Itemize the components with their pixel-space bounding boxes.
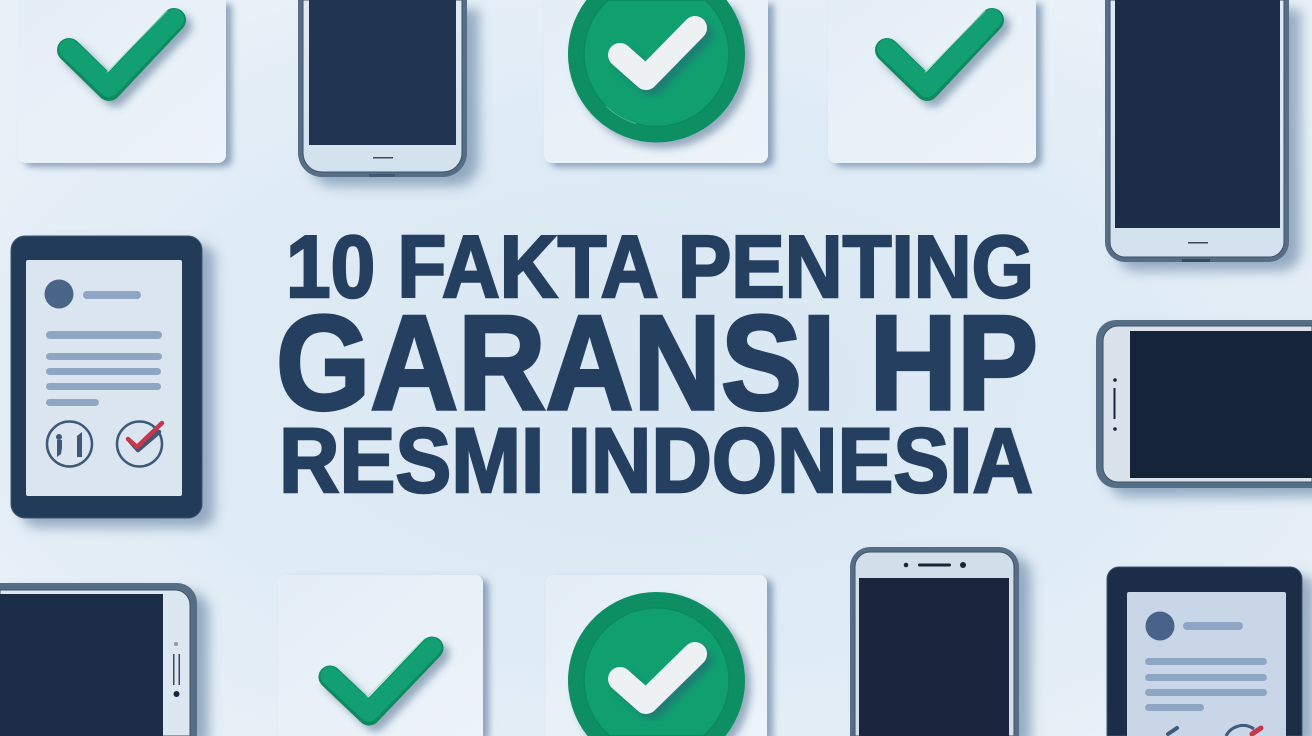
phone: top right xyxy=(1105,0,1289,262)
document page xyxy=(1127,592,1286,736)
document page xyxy=(26,260,182,496)
phone: bottom left landscape xyxy=(0,583,197,736)
phone: top left xyxy=(298,0,467,177)
card: top center green badge xyxy=(544,0,768,163)
icon: green badge check xyxy=(568,0,745,143)
icon: green check xyxy=(330,638,432,714)
icon: green check xyxy=(887,11,992,89)
icon: tools circle xyxy=(47,422,92,466)
icon: green badge check xyxy=(568,592,745,736)
card: bottom center green badge xyxy=(546,575,767,736)
title line 2: GARANSI HP xyxy=(276,287,1038,438)
card: top right green check xyxy=(828,0,1036,163)
title line 3: RESMI INDONESIA xyxy=(279,408,1033,512)
card: top left green check xyxy=(18,0,226,163)
icon: green check xyxy=(69,11,174,89)
phone: bottom center xyxy=(850,547,1019,736)
card: bottom left green check xyxy=(278,575,483,736)
tablet: document bottom right xyxy=(1107,567,1302,736)
icon: red check circle xyxy=(117,422,162,466)
tablet: document left xyxy=(11,236,202,518)
title line 1: 10 FAKTA PENTING xyxy=(286,217,1034,316)
phone: middle right landscape xyxy=(1096,320,1312,488)
title xyxy=(276,217,1038,512)
